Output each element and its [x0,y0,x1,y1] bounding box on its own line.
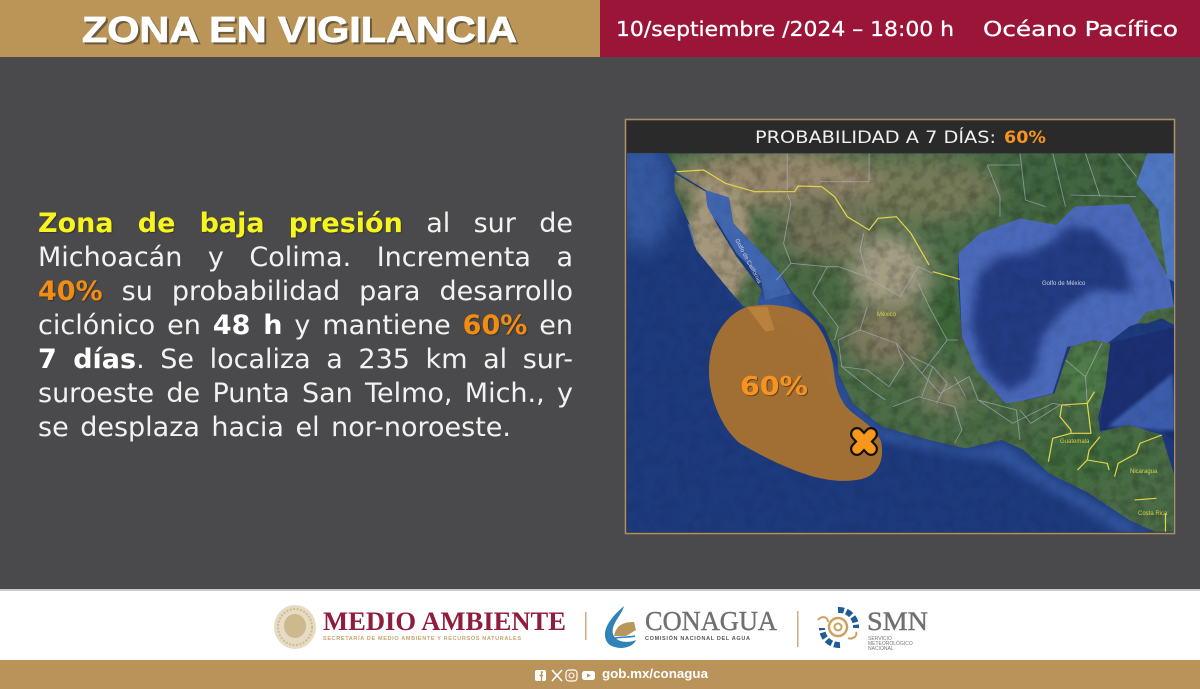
logo: Conagua [605,606,777,648]
header band: title: ZONA EN VIGILANCIA [84,11,519,52]
logo: SMN: NACIONAL [868,646,894,652]
logo: SMN: SMN [867,607,928,636]
header band: date and region: Océano Pacífico [983,17,1178,41]
footer: logos [0,589,1200,660]
probability area: 60% [709,305,882,481]
text block: description: 7 días. Se localiza a 235 km al sur- [38,344,573,375]
satellite map: Guatemala [1060,439,1090,445]
icon: current position marker [857,434,871,449]
text block: description: ciclónico en 48 h y mantiene 60% en [38,310,573,341]
satellite map: México [877,312,897,318]
text block: description: suroeste de Punta San Telmo, Mich., y [38,378,573,409]
panel: map [609,120,1184,540]
header band: title: ZONA EN VIGILANCIA [82,9,517,50]
logo: SMN [818,607,928,652]
header band: date and region [600,0,1200,57]
probability area: 60%: 60% [741,373,809,403]
logo: Medio Ambiente: SECRETARÍA DE MEDIO AMBIENTE Y RECURSOS NATURALES [323,634,521,642]
probability area: 60%: 60% [740,372,808,402]
footer: social band [0,660,1200,689]
logo: SMN: SERVICIO [868,636,892,642]
satellite map: Nicaragua [1130,469,1158,475]
footer: social band: gob.mx/conagua [602,666,709,681]
satellite map: Golfo de California [733,238,762,285]
header band: date and region: 10/septiembre /2024 – 18:00 h [616,17,954,41]
map heading: PROBABILIDAD A 7 DÍAS: [755,126,996,148]
header band: title [0,0,600,57]
logo: Conagua: COMISIÓN NACIONAL DEL AGUA [645,634,750,642]
logo: Conagua: CONAGUA [645,606,777,636]
text block: description: Zona de baja presión al sur de [38,208,573,239]
logo: Medio Ambiente [274,605,566,649]
text block: description [38,208,573,443]
logo: SMN: METEOROLÓGICO [868,640,913,647]
map heading: 60% [1004,128,1046,148]
text block: description: 40% su probabilidad para desarrollo [38,276,573,307]
icons: social media [535,670,595,681]
map heading [755,126,1046,148]
satellite map: Golfo de México [1042,281,1086,287]
satellite map: Costa Rica [1138,511,1168,517]
satellite map [609,137,1184,540]
text block: description: Michoacán y Colima. Incrementa a [38,242,573,273]
logo: Medio Ambiente: MEDIO AMBIENTE [323,607,566,636]
text block: description: se desplaza hacia el nor-noroeste. [38,412,511,443]
